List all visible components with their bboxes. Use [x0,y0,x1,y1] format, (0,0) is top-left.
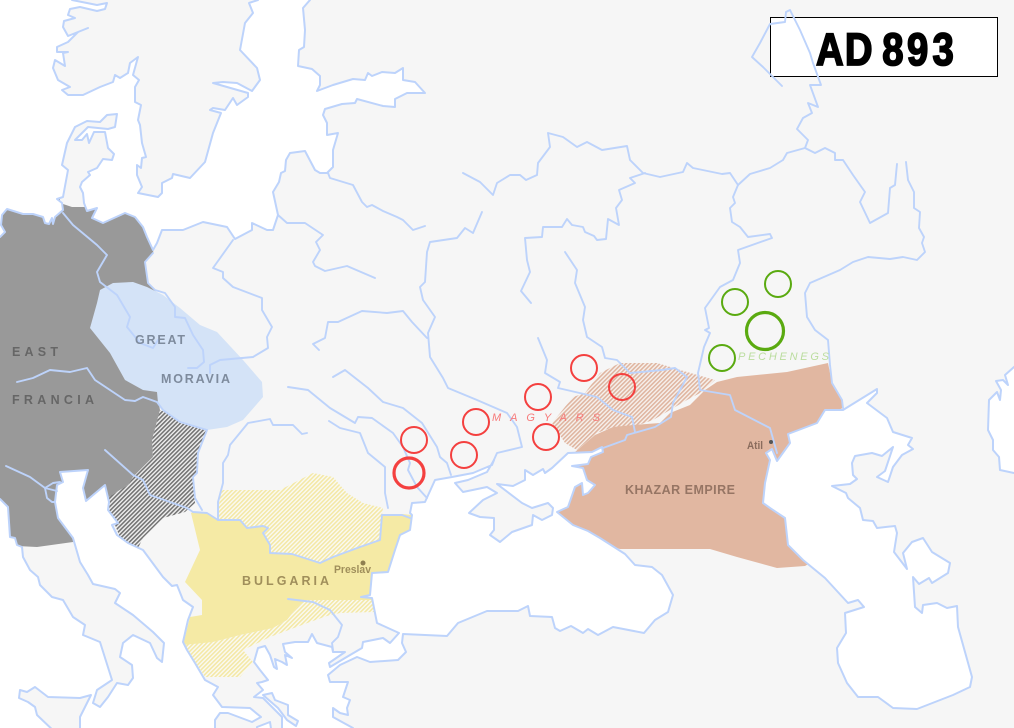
territory: East Francia [0,195,160,547]
label: Great Moravia: GREAT [135,333,185,347]
title text: AD 893 [816,24,954,75]
label: Bulgaria: BULGARIA [242,574,329,588]
label: Magyars: MAGYARS [492,412,601,424]
label: East Francia: EAST [12,345,58,359]
label: Great Moravia: MORAVIA [161,372,230,386]
label: Great Moravia [135,333,230,386]
territory: Bulgaria south hatched [183,598,375,677]
territory: Bulgaria north hatched [218,473,383,563]
territory: Great Moravia [90,282,263,430]
territory: hatched Pannonian zone [105,410,207,550]
territory: Magyars hatched [552,363,715,450]
sea: Caspian [763,389,972,709]
sea: Aral [988,362,1014,474]
label: Pechenegs: PECHENEGS [738,351,830,363]
capital: Preslav: Preslav [334,564,372,576]
territory: Bulgaria [183,512,412,645]
label: East Francia [12,345,94,407]
sea: Mediterranean, Adriatic, Aegean, Marmara, Black Sea and Azov [0,447,673,728]
sea: North Sea and Baltic [0,0,425,250]
label: East Francia: FRANCIA [12,393,94,407]
island: Euboea [263,693,298,726]
Pecheneg settlement circles [709,271,791,371]
Magyar settlement circles [394,355,635,488]
territory: Khazar Empire [558,363,843,568]
island: Sicily [19,687,91,728]
title box [770,18,998,76]
capital: Atil: Atil [747,440,763,452]
rivers [6,10,925,650]
label: Khazar Empire: KHAZAR EMPIRE [625,483,735,497]
capital: Atil [747,440,773,452]
